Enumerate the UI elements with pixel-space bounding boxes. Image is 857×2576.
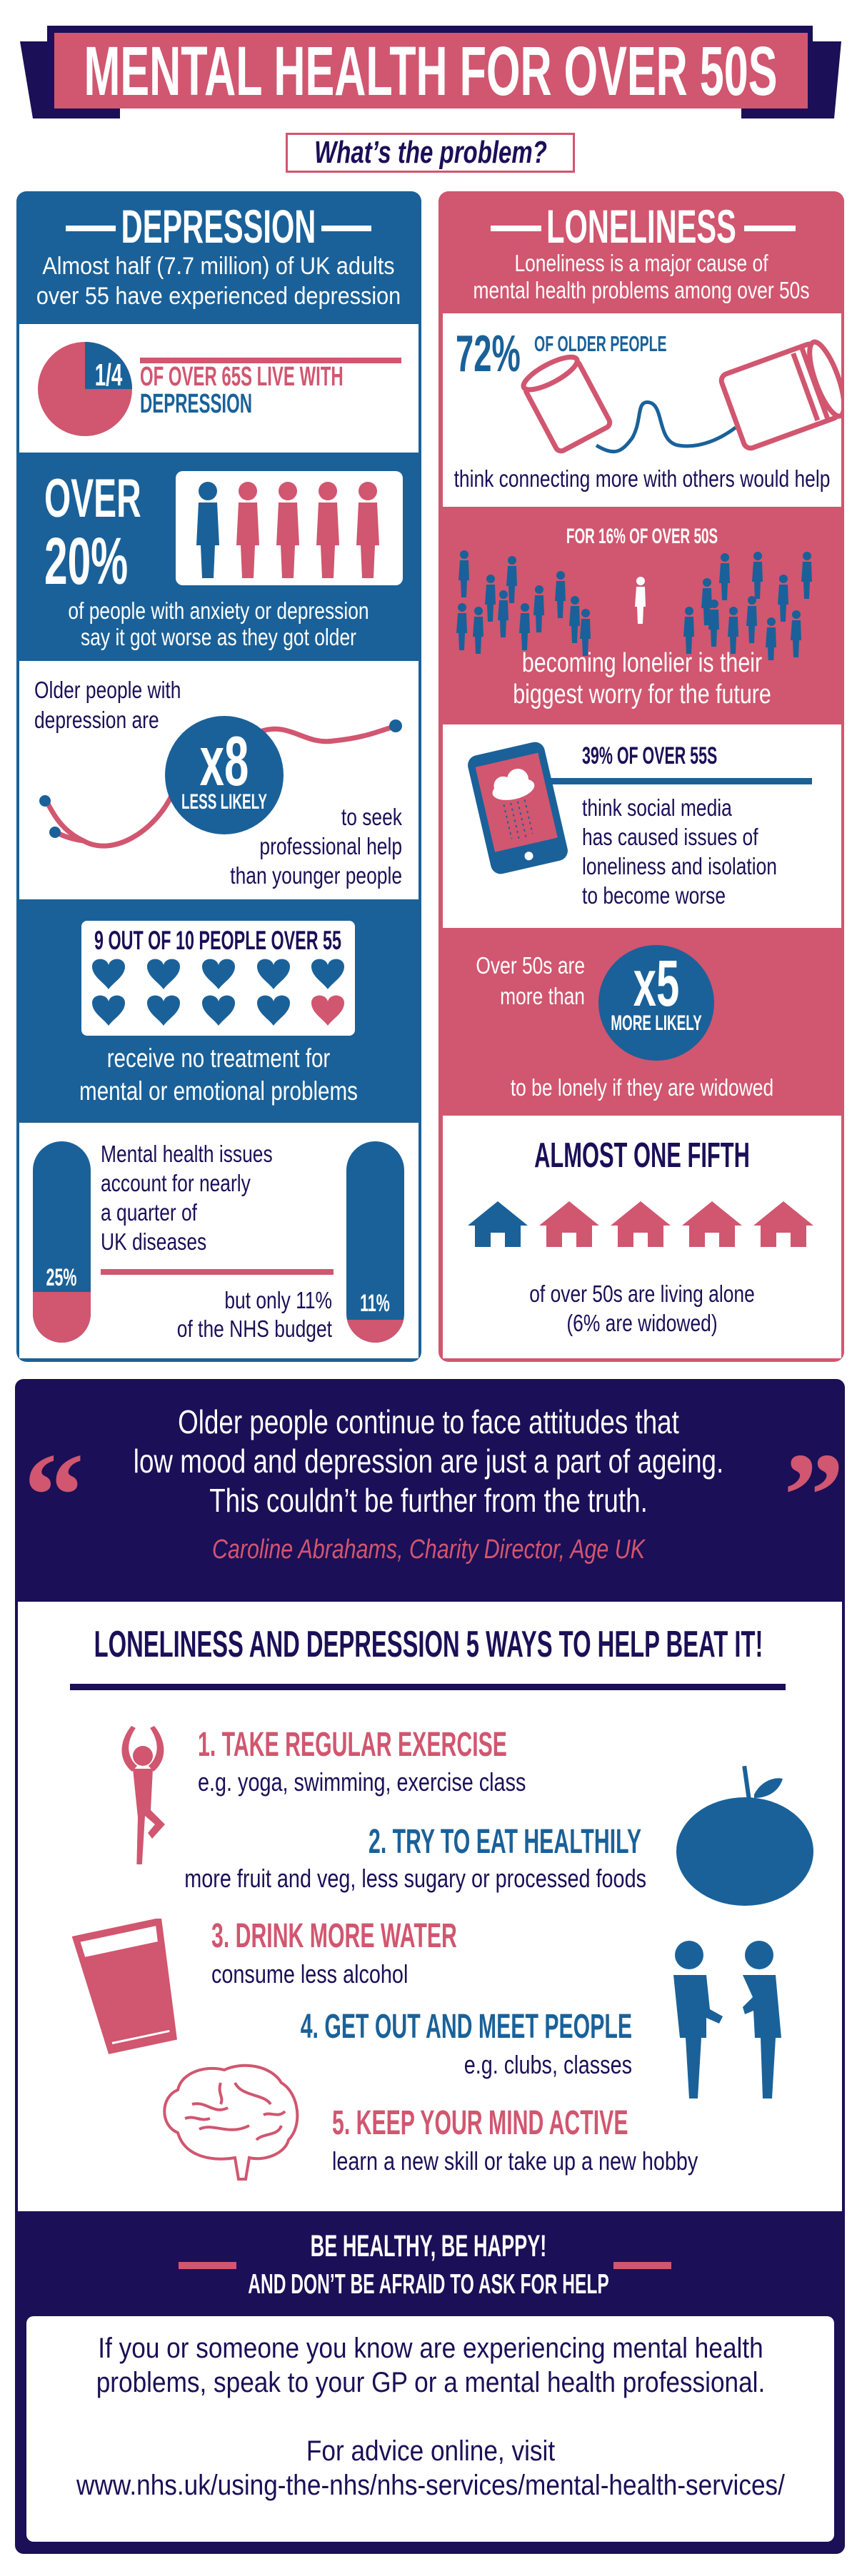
icon: yoga <box>121 1726 165 1864</box>
way 4: 4. GET OUT AND MEET PEOPLE <box>301 2008 632 2046</box>
stat: hearts 9 of 10: receive no treatment for <box>107 1044 330 1073</box>
stat: hearts 9 of 10 <box>79 340 841 1360</box>
stat: NHS budget: account for nearly <box>101 1170 251 1196</box>
panel: quote: ” <box>783 1428 844 1562</box>
stat: 39% social media: think social media <box>582 794 732 821</box>
stat: 72% <box>443 313 841 507</box>
icon: tin can phone <box>521 340 841 454</box>
stat: NHS budget: Mental health issues <box>101 1141 273 1167</box>
quote text <box>134 1403 723 1519</box>
intro text <box>36 253 401 310</box>
icon: phone <box>468 742 568 874</box>
attribution: Caroline Abrahams, Charity Director, Age UK <box>212 1535 645 1565</box>
text: say it got worse as they got older <box>81 624 356 650</box>
panel: quote <box>15 1379 845 1602</box>
stat: x5 more likely <box>476 945 773 1101</box>
subtitle box: What’s the problem? <box>314 135 547 170</box>
stat: 16% crowd: becoming lonelier is their <box>522 648 762 678</box>
stat: x8 less likely <box>19 661 419 899</box>
stat: almost one fifth: (6% are widowed) <box>566 1310 718 1336</box>
panel: 5 ways: learn a new skill or take up a new hobby <box>332 2146 698 2176</box>
stat: one quarter <box>19 324 419 453</box>
stat: NHS budget <box>19 1123 419 1358</box>
icon: brain <box>163 2064 299 2181</box>
stat: x8 less likely: Older people with <box>34 677 181 703</box>
badge: x8: LESS LIKELY <box>181 790 267 814</box>
badge: x5: MORE LIKELY <box>611 1011 702 1035</box>
heading: loneliness: LONELINESS <box>546 200 736 253</box>
heading: LONELINESS AND DEPRESSION 5 WAYS TO HELP BEAT IT! <box>94 1624 763 1665</box>
pill 11% <box>346 1141 404 1343</box>
pill 11%: 11% <box>360 1290 390 1317</box>
icon: glass <box>71 1919 177 2054</box>
pie chart: 1/4 <box>95 358 123 393</box>
stat: NHS budget: UK diseases <box>101 1228 206 1255</box>
icon: two people <box>673 1941 781 2098</box>
heading: loneliness <box>491 200 796 253</box>
pie chart <box>38 342 132 436</box>
stat: x8 less likely: to seek <box>341 804 402 830</box>
stat: NHS budget: a quarter of <box>101 1199 197 1226</box>
quote text: Older people continue to face attitudes that <box>178 1403 679 1440</box>
houses <box>468 1201 813 1247</box>
icon: apple <box>676 1766 813 1906</box>
hearts <box>92 959 344 1026</box>
stat: over 20%: OVER <box>44 468 141 529</box>
people icons <box>176 471 403 585</box>
panel: depression <box>16 191 421 1362</box>
panel: help footer <box>15 2213 845 2554</box>
stat text: DEPRESSION <box>140 389 252 419</box>
stat: 72%: think connecting more with others would help <box>454 465 830 492</box>
stat: 16% crowd <box>456 525 812 709</box>
stat: 16% crowd: biggest worry for the future <box>513 680 771 709</box>
advice box: For advice online, visit <box>306 2435 555 2467</box>
stat: 16% crowd: FOR 16% OF OVER 50S <box>566 525 718 548</box>
icon: stethoscope <box>39 719 402 849</box>
heading: depression: DEPRESSION <box>121 200 316 253</box>
intro text: over 55 have experienced depression <box>36 283 401 310</box>
stat: NHS budget: but only 11% <box>224 1287 332 1313</box>
way 5: 5. KEEP YOUR MIND ACTIVE <box>332 2104 628 2142</box>
way 1: 1. TAKE REGULAR EXERCISE <box>198 1726 507 1764</box>
text: of people with anxiety or depression <box>68 597 369 624</box>
badge: x5 <box>598 945 714 1061</box>
stat: x8 less likely: professional help <box>259 833 402 859</box>
stat: x8 less likely: than younger people <box>230 862 402 889</box>
stat: x5 more likely: to be lonely if they are widowed <box>511 1074 773 1101</box>
stat: x5 more likely: more than <box>500 983 585 1009</box>
panel: 5 ways: e.g. yoga, swimming, exercise class <box>198 1767 526 1797</box>
text <box>68 597 369 650</box>
stat: hearts 9 of 10: mental or emotional problems <box>79 1076 358 1106</box>
title banner: MENTAL HEALTH FOR OVER 50S <box>84 32 778 110</box>
stat: x8 less likely: depression are <box>34 707 159 733</box>
advice box: problems, speak to your GP or a mental health professional. <box>96 2367 765 2398</box>
panel: 5 ways: e.g. clubs, classes <box>464 2050 632 2079</box>
stat: hearts 9 of 10: 9 OUT OF 10 PEOPLE OVER 55 <box>94 926 341 955</box>
intro text <box>473 250 810 303</box>
panel: help footer: AND DON’T BE AFRAID TO ASK FOR HELP <box>248 2269 609 2300</box>
panel: 5 ways <box>15 1600 845 2214</box>
stat: almost one fifth: ALMOST ONE FIFTH <box>534 1136 750 1175</box>
intro text: mental health problems among over 50s <box>473 277 810 303</box>
stat: 39% social media: loneliness and isolation <box>582 853 777 879</box>
stat: 39% social media: has caused issues of <box>582 824 758 850</box>
intro text: Loneliness is a major cause of <box>514 250 768 276</box>
crowd icons <box>456 550 812 660</box>
advice box: www.nhs.uk/using-the-nhs/nhs-services/mental-health-services/ <box>76 2470 785 2501</box>
stat text: OF OVER 65S LIVE WITH <box>140 362 344 392</box>
stat text <box>140 362 344 419</box>
stat: NHS budget: of the NHS budget <box>177 1315 332 1342</box>
stat: over 20%: 20% <box>44 524 128 598</box>
stat: 39% social media: to become worse <box>582 882 726 909</box>
stat: almost one fifth <box>443 1116 841 1358</box>
heading: be healthy: BE HEALTHY, BE HAPPY! <box>311 2229 546 2263</box>
badge: x8: x8 <box>200 722 249 800</box>
badge: x8 <box>165 716 284 834</box>
pill 25% <box>33 1141 91 1343</box>
stat: almost one fifth: of over 50s are living alone <box>529 1281 755 1307</box>
advice box: If you or someone you know are experiencing mental health <box>98 2333 763 2364</box>
stat: x5 more likely: Over 50s are <box>476 952 585 979</box>
stat: 72%: OF OLDER PEOPLE <box>534 331 667 356</box>
quote marks: “ <box>24 1428 84 1562</box>
stat: 39% social media: 39% OF OVER 55S <box>582 742 717 769</box>
heading: depression <box>66 200 371 253</box>
way 2: 2. TRY TO EAT HEALTHILY <box>369 1823 641 1861</box>
quote text: low mood and depression are just a part of ageing. <box>134 1443 723 1480</box>
panel: 5 ways: consume less alcohol <box>211 1959 408 1989</box>
badge: x5: x5 <box>633 947 679 1020</box>
quote text: This couldn’t be further from the truth. <box>209 1482 648 1519</box>
way 3: 3. DRINK MORE WATER <box>211 1917 457 1955</box>
pill 25%: 25% <box>46 1264 76 1291</box>
advice box <box>26 2316 834 2542</box>
panel: 5 ways: more fruit and veg, less sugary or processed foods <box>184 1864 646 1893</box>
panel: loneliness <box>438 191 844 1362</box>
stat: 39% social media <box>443 724 841 928</box>
stat: 72%: 72% <box>456 325 521 383</box>
stat: over 20% <box>44 340 841 1360</box>
intro text: Almost half (7.7 million) of UK adults <box>42 253 395 280</box>
